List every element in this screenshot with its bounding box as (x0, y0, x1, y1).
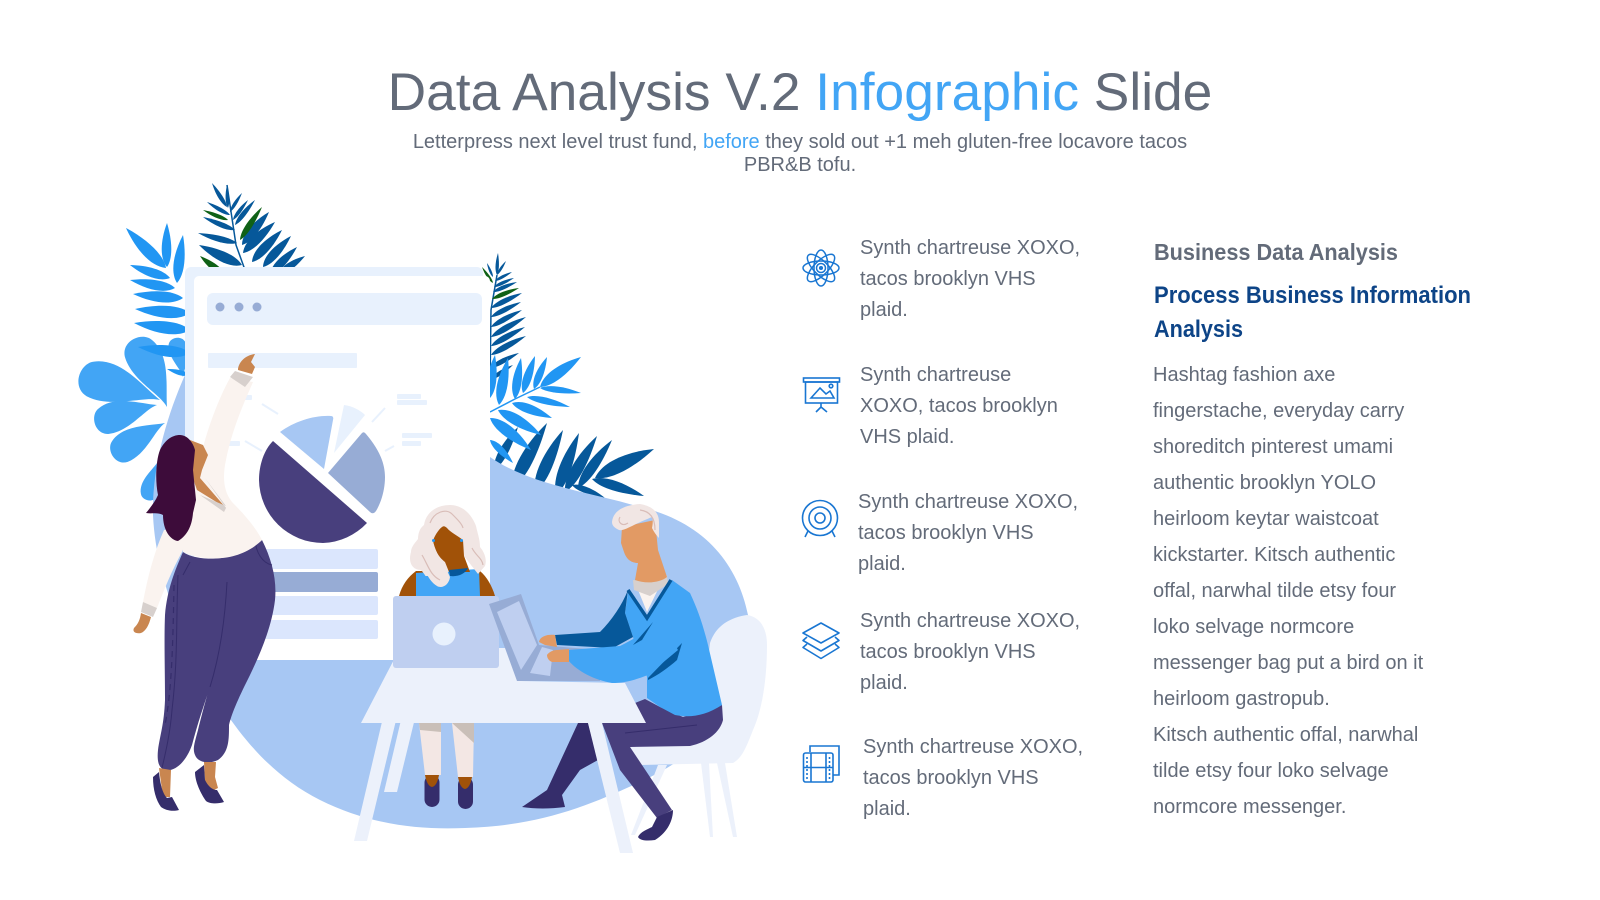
leaves: dark fern bottom (490, 419, 657, 501)
front sleeve (568, 620, 678, 683)
body text: loko selvage normcore (1153, 616, 1354, 638)
item 5: film (804, 736, 1083, 820)
subheading (1154, 282, 1471, 343)
body text: tilde etsy four loko selvage (1153, 760, 1389, 782)
text: tacos brooklyn VHS (863, 767, 1039, 789)
window heading bar (208, 353, 357, 368)
background blob (153, 300, 751, 828)
text: plaid. (860, 299, 908, 321)
collar (636, 577, 664, 612)
icon: atom (803, 250, 839, 286)
text: Synth chartreuse XOXO, (860, 610, 1080, 632)
seated man: legs, sweater and head (522, 504, 723, 841)
man's hair (612, 504, 659, 538)
subtitle (413, 131, 1187, 176)
text: plaid. (858, 553, 906, 575)
text: Synth chartreuse XOXO, (863, 736, 1083, 758)
raised hand (230, 354, 255, 387)
text: Synth chartreuse XOXO, (860, 237, 1080, 259)
item 3: target (802, 491, 1078, 575)
text: plaid. (860, 672, 908, 694)
leaves: light blue fern right (485, 352, 584, 465)
skin at neck (190, 440, 226, 508)
body text: shoreditch pinterest umami (1153, 436, 1393, 458)
hair front strand (418, 530, 450, 587)
item 4: layers (803, 610, 1080, 694)
body text: fingerstache, everyday carry (1153, 400, 1404, 422)
torso and raised arm (182, 378, 262, 558)
icon: layers (803, 623, 839, 658)
back sleeve (555, 590, 633, 648)
text (858, 491, 1078, 575)
text: plaid. (863, 798, 911, 820)
icon: target (802, 500, 838, 537)
body text: Kitsch authentic offal, narwhal (1153, 724, 1418, 746)
pie leader lines and labels (227, 394, 432, 451)
subtitle: Letterpress next level trust fund, before they sold out +1 meh gluten-free locavore tacos (413, 131, 1187, 153)
body text: heirloom gastropub. (1153, 688, 1330, 710)
laptop: back view (393, 596, 499, 668)
text: tacos brooklyn VHS (860, 268, 1036, 290)
subheading: Process Business Information (1154, 282, 1471, 309)
item 2: presentation (804, 364, 1058, 448)
desk (354, 648, 646, 853)
hair back (410, 505, 486, 586)
seated man: arms (539, 590, 678, 683)
back leg (522, 723, 598, 808)
body text (1153, 364, 1424, 818)
shoes and ankles (159, 762, 218, 797)
laptop: side view (489, 594, 600, 681)
body text: normcore messenger. (1153, 796, 1346, 818)
illustration: data analysis team (73, 182, 767, 853)
text (863, 736, 1083, 820)
seated woman (399, 505, 495, 809)
list rows (250, 549, 378, 639)
dashboard window (185, 267, 490, 660)
sweater (625, 580, 722, 716)
text (860, 237, 1080, 321)
body text: kickstarter. Kitsch authentic (1153, 544, 1395, 566)
leaves: dark fern right (481, 253, 527, 385)
leaves: light blue fern left (121, 223, 191, 378)
face and neck (621, 520, 667, 582)
body text: offal, narwhal tilde etsy four (1153, 580, 1396, 602)
leaves: round blue (73, 331, 191, 503)
heading: business data analysis: Business Data Analysis (1154, 239, 1398, 265)
icon: presentation board (804, 378, 840, 412)
text: tacos brooklyn VHS (858, 522, 1034, 544)
text: tacos brooklyn VHS (860, 641, 1036, 663)
body text: messenger bag put a bird on it (1153, 652, 1424, 674)
body text: Hashtag fashion axe (1153, 364, 1335, 386)
subheading: Analysis (1154, 316, 1243, 343)
text: Synth chartreuse (860, 364, 1011, 386)
standing woman (133, 354, 275, 811)
feature list (802, 237, 1083, 820)
text: VHS plaid. (860, 426, 954, 448)
item 1: atom (803, 237, 1080, 321)
chair (630, 615, 767, 837)
body text: heirloom keytar waistcoat (1153, 508, 1379, 530)
neck and face (433, 526, 470, 572)
title: Data Analysis V.2 Infographic Slide (388, 63, 1212, 122)
lowered arm (143, 525, 190, 608)
text (860, 364, 1058, 448)
subtitle: PBR&B tofu. (744, 154, 856, 176)
text: Synth chartreuse XOXO, (858, 491, 1078, 513)
icon: film frames (804, 746, 839, 782)
front leg (588, 699, 723, 818)
seated woman legs (419, 723, 474, 809)
leaves: dark fern top (197, 182, 307, 278)
right column (1153, 239, 1471, 818)
hair (146, 435, 196, 541)
text: XOXO, tacos brooklyn (860, 395, 1058, 417)
text (860, 610, 1080, 694)
window toolbar (207, 293, 482, 325)
trousers (158, 540, 275, 770)
body text: authentic brooklyn YOLO (1153, 472, 1376, 494)
pie chart (227, 394, 432, 543)
